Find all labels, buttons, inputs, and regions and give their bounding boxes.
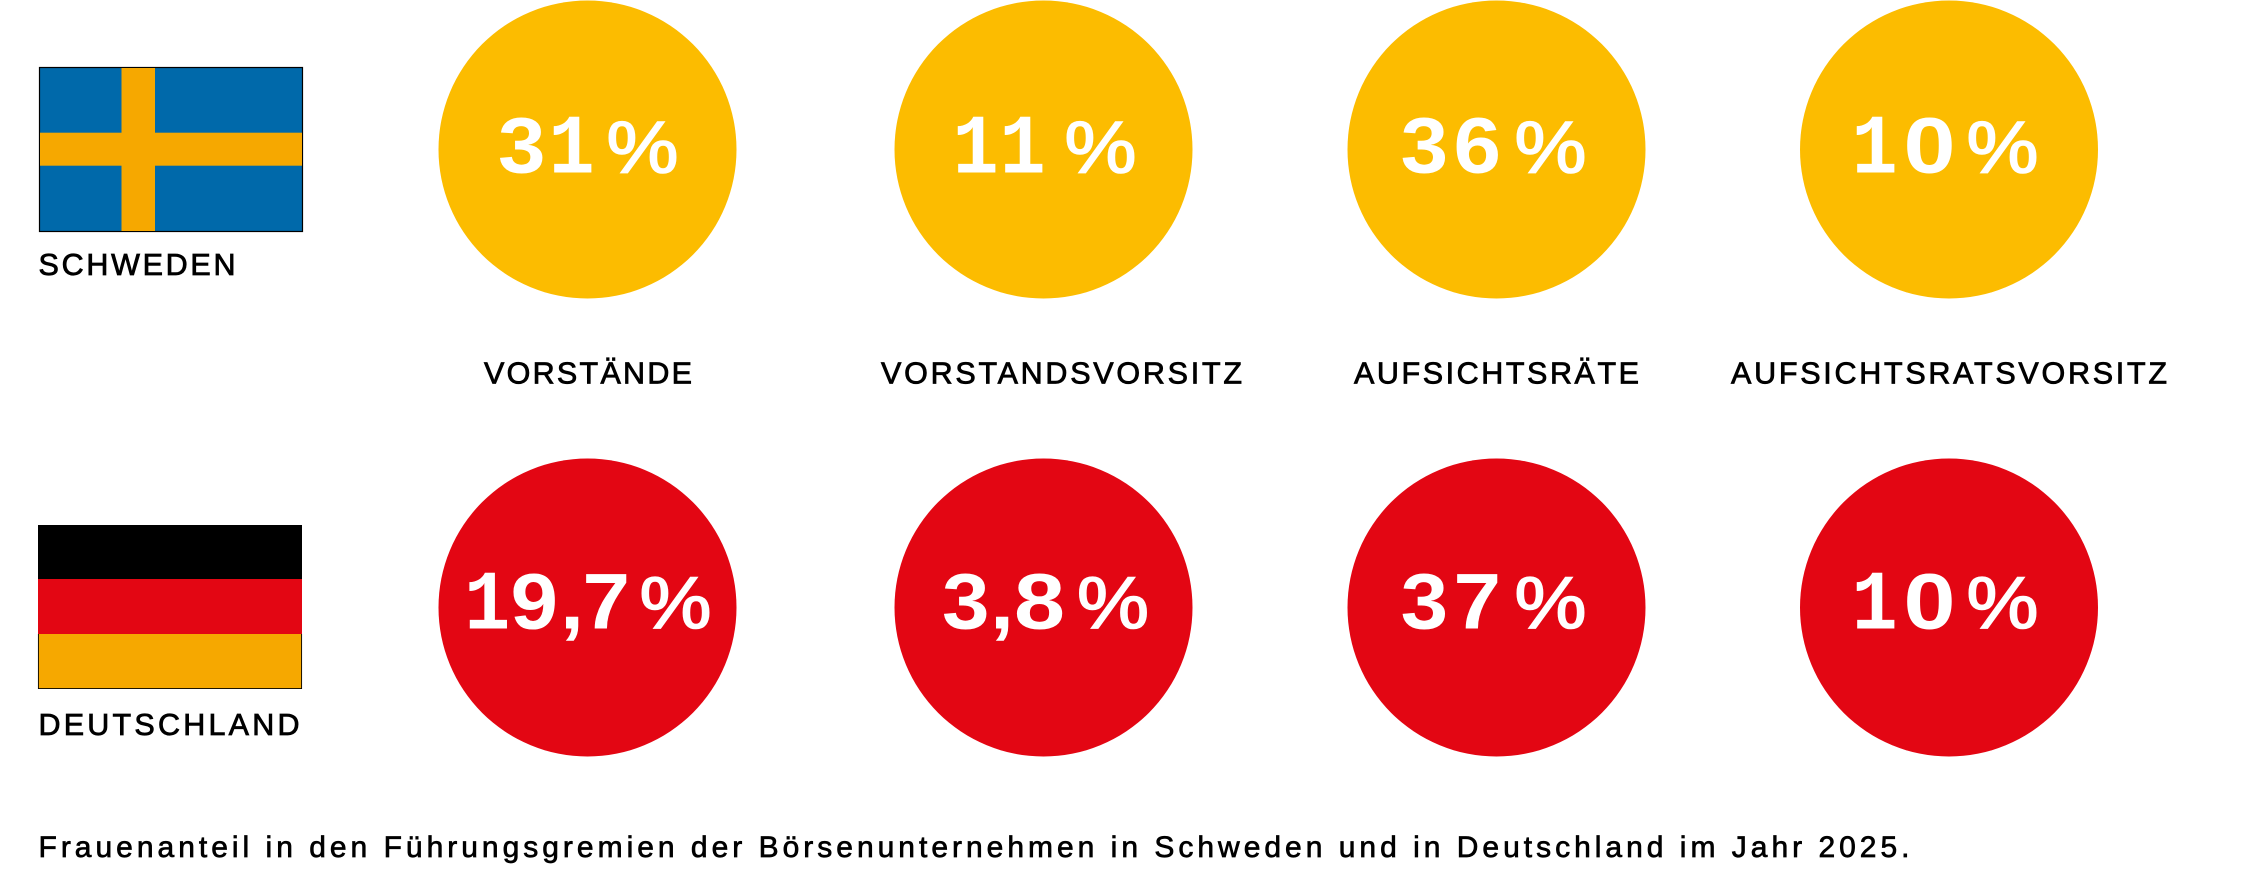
circle: Schweden Vorstandsvorsitz 11%: 1 — [1000, 104, 1046, 199]
category label: Vorstandsvorsitz: VORSTANDSVORSITZ — [881, 356, 1242, 390]
icon: German flag — [38, 525, 302, 689]
circle: Schweden Vorstandsvorsitz 11% — [894, 0, 1192, 298]
circle: Deutschland Aufsichtsräte 37%: % — [1514, 563, 1586, 644]
circle: Deutschland Vorstände 19,7%: 1 — [464, 559, 510, 654]
circle: Deutschland Vorstandsvorsitz 3,8%: % — [1077, 563, 1149, 644]
circle: Deutschland Aufsichtsratsvorsitz 10%: 0 — [1904, 556, 1956, 645]
circle: Deutschland Vorstandsvorsitz 3,8%: 3 — [942, 556, 990, 645]
circle: Deutschland Vorstandsvorsitz 3,8% — [894, 458, 1192, 756]
circle: Schweden Aufsichtsräte 36%: 6 — [1454, 101, 1501, 190]
circle: Deutschland Vorstände 19,7%: 7 — [582, 556, 630, 645]
circle: Schweden Vorstände 31%: % — [606, 108, 678, 188]
circle: Schweden Aufsichtsratsvorsitz 10%: % — [1966, 108, 2038, 188]
circle: Schweden Aufsichtsräte 36%: % — [1514, 108, 1586, 188]
circle: Deutschland Aufsichtsratsvorsitz 10%: 1 — [1852, 559, 1898, 654]
circle: Schweden Aufsichtsräte 36%: 3 — [1401, 101, 1448, 190]
circle: Schweden Vorstände 31%: 1 — [549, 104, 595, 199]
circle: Deutschland Aufsichtsräte 37%: 3 — [1401, 556, 1448, 645]
circle: Deutschland Aufsichtsräte 37% — [1348, 458, 1646, 756]
caption: Frauenanteil in den Führungsgremien der Börsenunternehmen in Schweden und in Deutschland im Jahr 2025. — [38, 831, 1909, 864]
category label: Aufsichtsräte: AUFSICHTSRÄTE — [1354, 356, 1639, 390]
circle: Deutschland Vorstandsvorsitz 3,8%: , — [990, 556, 1014, 645]
circle: Schweden Aufsichtsratsvorsitz 10%: 0 — [1904, 101, 1956, 190]
circle: Schweden Aufsichtsratsvorsitz 10%: 1 — [1852, 104, 1898, 199]
label: Schweden: SCHWEDEN — [38, 248, 236, 282]
circle: Deutschland Aufsichtsratsvorsitz 10% — [1800, 458, 2098, 756]
circle: Schweden Vorstandsvorsitz 11%: % — [1064, 108, 1136, 188]
circle: Deutschland Aufsichtsratsvorsitz 10%: % — [1966, 563, 2038, 644]
category label: Vorstände: VORSTÄNDE — [484, 356, 692, 390]
circle: Schweden Vorstandsvorsitz 11%: 1 — [953, 104, 999, 199]
circle: Schweden Aufsichtsräte 36% — [1348, 0, 1646, 298]
label: Deutschland: DEUTSCHLAND — [38, 708, 300, 742]
circle: Schweden Vorstände 31%: 3 — [498, 101, 546, 190]
circle: Deutschland Vorstände 19,7%: % — [640, 563, 712, 644]
icon: Swedish flag — [40, 68, 302, 232]
circle: Deutschland Vorstandsvorsitz 3,8%: 8 — [1014, 556, 1065, 645]
circle: Schweden Aufsichtsratsvorsitz 10% — [1800, 0, 2098, 298]
circle: Deutschland Vorstände 19,7% — [438, 458, 736, 756]
category label: Aufsichtsratsvorsitz: AUFSICHTSRATSVORSITZ — [1731, 356, 2167, 390]
circle: Deutschland Vorstände 19,7%: 9 — [510, 556, 558, 645]
circle: Schweden Vorstände 31% — [438, 0, 736, 298]
circle: Deutschland Aufsichtsräte 37%: 7 — [1454, 556, 1501, 645]
circle: Deutschland Vorstände 19,7%: , — [560, 556, 584, 645]
